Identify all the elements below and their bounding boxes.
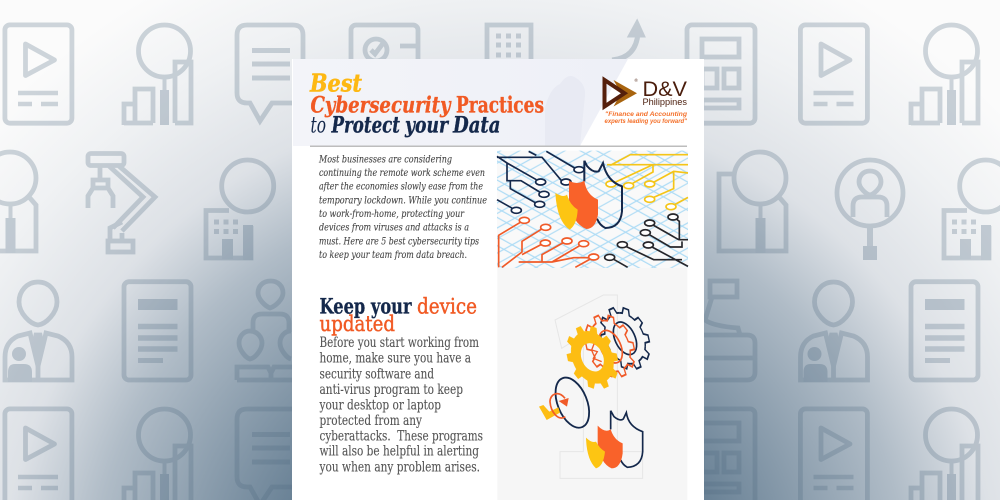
icon: checklist — [351, 25, 418, 123]
logo tagline: experts leading you forward" — [604, 118, 688, 125]
logo mark — [604, 80, 637, 106]
panel background — [497, 268, 687, 500]
icon: layout bottom — [687, 409, 755, 500]
icon: document — [124, 282, 191, 380]
icon: robot arm — [88, 154, 155, 252]
orange trace across yellow gear hole — [592, 344, 602, 362]
intro paragraph: continuing the remote work scheme even — [319, 168, 485, 179]
orange circuit traces — [499, 217, 599, 267]
navy circuit traces — [497, 151, 584, 213]
orange shield — [569, 181, 598, 229]
intro paragraph: to work-from-home, protecting your — [319, 209, 465, 220]
icon: office tower — [487, 25, 531, 123]
icon: video document — [5, 25, 72, 123]
intro paragraph: Most businesses are considering — [318, 154, 452, 165]
header band — [293, 59, 687, 147]
icon: person right — [800, 282, 868, 382]
icon: person at desk — [700, 281, 755, 380]
navy ring — [549, 373, 596, 433]
yellow circuit traces — [606, 155, 688, 210]
title line: to Protect your Data: to — [310, 114, 326, 138]
title line: to Protect your Data: your — [404, 112, 449, 138]
logo tagline — [604, 111, 688, 125]
section body text: your desktop or laptop — [319, 397, 441, 413]
gear: navy outline — [590, 299, 660, 378]
icon: page layout — [687, 25, 755, 123]
page sheet — [292, 59, 704, 500]
logo registered mark: ® — [634, 77, 638, 83]
section body text: protected from any — [320, 413, 422, 429]
logo: D&V Philippines — [604, 77, 688, 125]
yellow shield — [586, 438, 605, 468]
section body text: Before you start working from — [320, 335, 479, 351]
icon: partial magnifier left — [0, 152, 36, 253]
icon: chart bottom — [124, 409, 191, 500]
gear: orange outline — [575, 307, 645, 385]
icon: group of people — [237, 281, 292, 380]
intro paragraph: temporary lockdown. While you continue — [319, 195, 487, 206]
icon: person in magnifier — [837, 160, 903, 260]
illustration: circuit with shields — [497, 151, 688, 268]
icon: magnifier over bar chart — [124, 25, 191, 125]
intro paragraph: devices from viruses and attacks is a — [319, 223, 469, 234]
circuit background — [497, 151, 688, 268]
heading: updated: updated — [320, 312, 395, 336]
section heading — [320, 294, 477, 336]
heading: Keep your: Keep your — [320, 294, 412, 319]
section body text: home, make sure you have a — [320, 351, 471, 367]
logo tagline: "Finance and Accounting — [605, 111, 687, 118]
outline numeral one — [555, 295, 643, 478]
logo subtitle: Philippines — [642, 97, 688, 107]
icon: growth arrow — [612, 24, 642, 60]
title line: Cybersecurity Practices: Cybersecurity — [310, 92, 452, 118]
logo wordmark: D&V — [642, 77, 688, 101]
section body text: you when any problem arises. — [319, 459, 480, 475]
icon: document right — [911, 282, 978, 380]
intro paragraph — [318, 154, 487, 261]
title line: Best: Best — [309, 68, 362, 98]
title line: Cybersecurity Practices: Practices — [456, 92, 544, 118]
heading: device: device — [417, 295, 477, 319]
gear hole: navy — [609, 318, 641, 358]
icon: building magnifier — [206, 160, 274, 260]
icon: speech bubble — [237, 25, 303, 121]
navy outline shield — [611, 411, 643, 467]
section body text: will also be helpful in alerting — [320, 444, 479, 460]
intro paragraph: must. Here are 5 best cybersecurity tips — [319, 236, 479, 247]
title line: to Protect your Data: Protect — [331, 112, 400, 138]
section body text: anti-virus program to keep — [320, 382, 463, 398]
section body text: cyberattacks. These programs — [320, 428, 483, 444]
icon: chart bottom right — [911, 409, 978, 500]
illustration: updates panel — [497, 268, 687, 500]
black circuit traces — [605, 214, 688, 267]
header rule — [310, 146, 687, 147]
icon: video bottom right — [800, 409, 867, 500]
yellow key — [539, 405, 560, 420]
title line: to Protect your Data — [310, 112, 500, 138]
infographic page — [292, 59, 704, 500]
orange rotation arrow — [550, 394, 569, 418]
gear: yellow filled — [556, 317, 629, 398]
title line: to Protect your Data: Data — [452, 112, 500, 138]
section body text — [319, 335, 483, 475]
icon: chart right — [911, 25, 978, 125]
icon: video document bottom — [5, 409, 72, 500]
icon: speech bubble bottom — [237, 409, 303, 500]
intro paragraph: after the economies slowly ease from the — [319, 182, 483, 193]
navy outline shield — [584, 161, 622, 228]
faint presenter silhouette — [545, 76, 585, 146]
icon: businessman — [5, 282, 72, 382]
icon: magnifier document right — [719, 152, 786, 253]
yellow shield — [555, 193, 578, 230]
header background — [293, 59, 628, 146]
section body text: security software and — [320, 366, 434, 382]
gear hole: orange — [594, 327, 627, 367]
intro paragraph: to keep your team from data breach. — [319, 250, 467, 261]
orange shield — [598, 426, 623, 468]
title — [309, 68, 544, 138]
icon: video document right — [800, 25, 867, 123]
icon: building magnifier partly hidden — [944, 160, 1000, 260]
